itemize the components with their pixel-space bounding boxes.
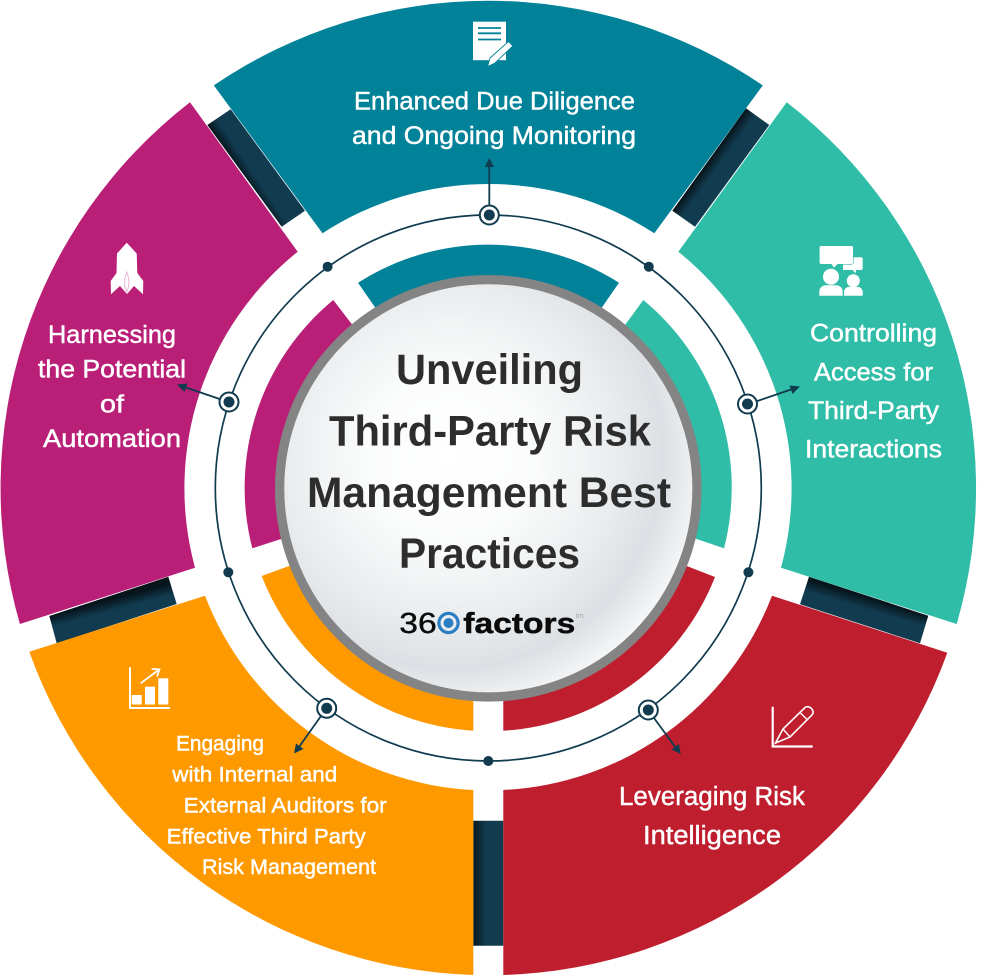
connector strip: green to red	[800, 577, 928, 643]
title: Unveiling	[396, 346, 583, 394]
connector strip: teal to green	[672, 108, 769, 227]
heading: Controlling Access for Third-Party Interactions: Third-Party	[808, 397, 940, 425]
panel: Leveraging Risk Intelligence	[503, 596, 947, 975]
arrow: lower left	[294, 716, 321, 754]
connector ring with nodes and arrows	[177, 158, 800, 766]
logo: 360factors: tm	[576, 611, 584, 620]
inner arc: red	[503, 540, 715, 731]
arrow: top	[485, 158, 494, 206]
arrow: left	[177, 384, 221, 400]
panel: Engaging with Auditors	[29, 596, 473, 975]
logo: 360factors: factors	[463, 608, 575, 640]
heading: Leveraging Risk Intelligence: Leveraging Risk	[619, 783, 805, 811]
inner arc: magenta	[245, 300, 410, 548]
inner arc: green	[570, 300, 732, 548]
heading: Enhanced Due Diligence and Ongoing Monitoring: and Ongoing Monitoring	[352, 122, 636, 150]
heading: Controlling Access for Third-Party Interactions: Controlling	[810, 320, 937, 348]
title: Management Best	[307, 469, 671, 517]
heading: Harnessing the Potential of Automation: Automation	[43, 425, 181, 453]
icon: people with speech bubbles	[819, 246, 863, 296]
heading: Controlling Access for Third-Party Interactions	[805, 320, 942, 464]
heading: Controlling Access for Third-Party Interactions: Interactions	[805, 436, 942, 464]
heading: Harnessing the Potential of Automation: the Potential	[38, 356, 186, 384]
icon: bar chart with arrow	[130, 667, 170, 708]
connector strip: red to orange	[473, 821, 503, 946]
icon: rocket	[111, 243, 143, 294]
title	[307, 346, 671, 578]
heading: Engaging with Internal and External Auditors	[167, 732, 387, 879]
title: Practices	[399, 530, 580, 578]
logo: 360factors	[399, 608, 584, 640]
small ring dots	[223, 262, 753, 766]
heading: Engaging with Internal and External Auditors: Effective Third Party	[167, 824, 366, 848]
icon: pencil on axes	[773, 707, 813, 746]
inner arc: teal	[358, 245, 619, 352]
heading: Engaging with Internal and External Auditors: Risk Management	[202, 855, 376, 879]
large nodes	[220, 206, 757, 720]
icon: document and pencil	[473, 22, 513, 67]
heading: Leveraging Risk Intelligence	[619, 783, 805, 850]
title: Third-Party Risk	[329, 408, 651, 456]
heading: Engaging with Internal and External Auditors: with Internal and	[171, 762, 337, 786]
connector strip: magenta to teal	[207, 109, 305, 227]
arrow: lower right	[654, 718, 681, 754]
heading: Leveraging Risk Intelligence: Intelligence	[643, 822, 781, 850]
heading: Enhanced Due Diligence and Ongoing Monitoring	[352, 88, 636, 150]
heading: Harnessing the Potential of Automation: of	[100, 390, 124, 418]
panel: Enhanced Due Diligence	[214, 1, 763, 233]
heading: Controlling Access for Third-Party Interactions: Access for	[814, 358, 933, 386]
panel: Harnessing Automation	[1, 102, 298, 624]
heading: Harnessing the Potential of Automation	[38, 321, 186, 453]
heading: Engaging with Internal and External Auditors: External Auditors for	[184, 793, 387, 817]
inner arc: orange	[262, 540, 473, 731]
logo: 360factors: 36	[399, 608, 437, 640]
panel: Controlling Access	[678, 102, 976, 624]
heading: Enhanced Due Diligence and Ongoing Monitoring: Enhanced Due Diligence	[354, 88, 635, 116]
center disc	[280, 280, 697, 697]
heading: Harnessing the Potential of Automation: Harnessing	[48, 321, 176, 349]
connector strip: orange to magenta	[49, 577, 177, 643]
heading: Engaging with Internal and External Auditors: Engaging	[176, 732, 264, 756]
arrow: right	[756, 386, 800, 402]
